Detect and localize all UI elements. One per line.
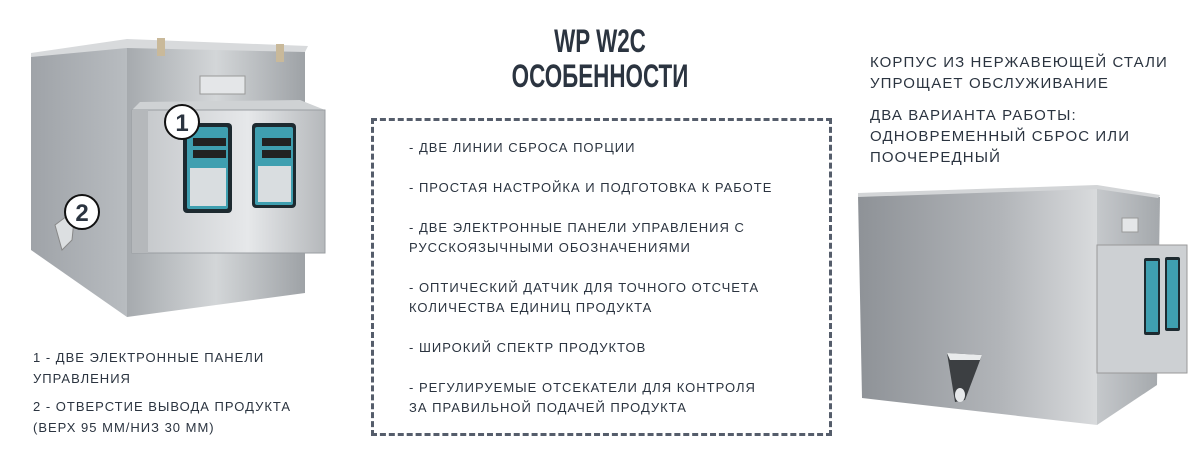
- label circle 2: 2: [75, 200, 89, 227]
- label circle 2: [65, 195, 99, 229]
- features box: - ОПТИЧЕСКИЙ ДАТЧИК ДЛЯ ТОЧНОГО ОТСЧЕТА: [409, 280, 759, 295]
- left captions: [33, 350, 264, 386]
- right texts: КОРПУС ИЗ НЕРЖАВЕЮЩЕЙ СТАЛИ: [870, 54, 1168, 71]
- title: WP W2C: [554, 23, 646, 59]
- features box: КОЛИЧЕСТВА ЕДИНИЦ ПРОДУКТА: [409, 300, 652, 314]
- left captions: УПРАВЛЕНИЯ: [33, 370, 131, 386]
- features box: ЗА ПРАВИЛЬНОЙ ПОДАЧЕЙ ПРОДУКТА: [409, 400, 687, 414]
- panel 2: [252, 123, 296, 208]
- features box: [371, 118, 832, 436]
- title: [512, 23, 688, 94]
- text: ОДНОВРЕМЕННЫЙ СБРОС ИЛИ: [870, 128, 1130, 145]
- right texts: УПРОЩАЕТ ОБСЛУЖИВАНИЕ: [870, 75, 1109, 92]
- features box: - ПРОСТАЯ НАСТРОЙКА И ПОДГОТОВКА К РАБОТЕ: [409, 180, 772, 195]
- left captions: 1 - ДВЕ ЭЛЕКТРОННЫЕ ПАНЕЛИ: [33, 350, 264, 365]
- product chute: [947, 353, 982, 402]
- features list: - ДВЕ ЛИНИИ СБРОСА ПОРЦИИ: [409, 140, 636, 155]
- text: 2 - ОТВЕРСТИЕ ВЫВОДА ПРОДУКТА: [33, 399, 291, 414]
- label circle 1: 1: [175, 110, 189, 137]
- title: ОСОБЕННОСТИ: [512, 58, 688, 94]
- control box: [132, 100, 325, 253]
- text: ПООЧЕРЕДНЫЙ: [870, 149, 1001, 166]
- right texts: [870, 54, 1168, 92]
- text: ДВА ВАРИАНТА РАБОТЫ:: [870, 107, 1077, 124]
- machine illustration: right: [858, 185, 1188, 425]
- features box: - РЕГУЛИРУЕМЫЕ ОТСЕКАТЕЛИ ДЛЯ КОНТРОЛЯ: [409, 380, 756, 395]
- right control box: [1097, 245, 1187, 373]
- features box: - ДВЕ ЭЛЕКТРОННЫЕ ПАНЕЛИ УПРАВЛЕНИЯ С: [409, 220, 745, 235]
- label circle 1: [165, 105, 199, 139]
- features box: - ШИРОКИЙ СПЕКТР ПРОДУКТОВ: [409, 340, 646, 355]
- features box: РУССКОЯЗЫЧНЫМИ ОБОЗНАЧЕНИЯМИ: [409, 240, 691, 254]
- machine illustration: left (front view with labels): [31, 38, 326, 317]
- panel 1: [183, 123, 232, 213]
- text: (ВЕРХ 95 ММ/НИЗ 30 ММ): [33, 420, 215, 434]
